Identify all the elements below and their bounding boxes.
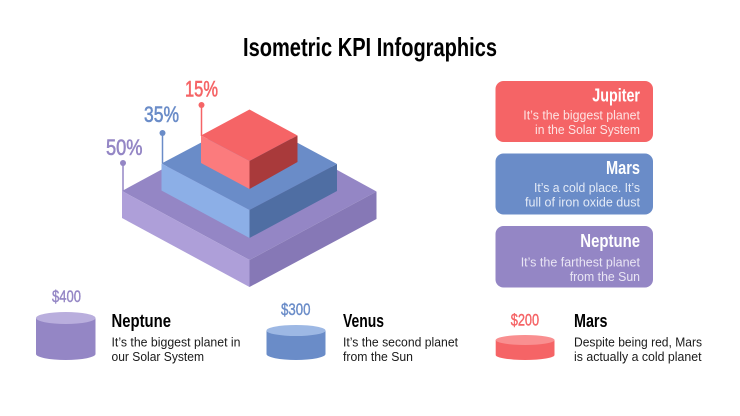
panel: Jupiter card: Jupiter [592, 86, 640, 106]
description: Venus: It’s the second planet [343, 336, 459, 350]
icon: red cylinder [496, 335, 554, 360]
panel: Neptune card [496, 226, 653, 288]
KPI item: Venus [266, 301, 459, 364]
panel: Jupiter card: It’s the biggest planet [523, 108, 641, 122]
KPI item: Mars [496, 311, 702, 364]
KPI item: Neptune [36, 288, 241, 364]
panel: Jupiter card [496, 81, 653, 142]
description: Neptune [112, 336, 241, 364]
label: 15%: 15% [185, 76, 218, 102]
value: $400: $400 [52, 288, 81, 306]
value: $300: $300 [281, 301, 310, 319]
pyramid layer: 50% purple base [122, 122, 376, 287]
heading: Mars: Mars [574, 311, 608, 331]
panel: Neptune card: It’s the farthest planet [521, 256, 641, 270]
panel: Neptune card: Neptune [580, 231, 640, 251]
heading: Neptune: Neptune [112, 311, 171, 331]
panel: Mars card: Mars [606, 158, 640, 178]
isometric pyramid chart [106, 76, 376, 287]
icon: purple cylinder [36, 312, 96, 360]
description: Venus: from the Sun [343, 350, 413, 364]
panel: Jupiter card: in the Solar System [535, 123, 640, 137]
label: 35%: 35% [144, 102, 179, 127]
description: Mars [574, 336, 702, 364]
description: Neptune: It’s the biggest planet in [112, 336, 241, 350]
title: Isometric KPI Infographics [243, 32, 497, 62]
panel: Mars card: It’s a cold place. It’s [534, 181, 640, 195]
description: Neptune: our Solar System [112, 350, 204, 364]
pin: 15% [198, 102, 204, 136]
heading: Venus: Venus [343, 311, 384, 331]
panel: Neptune card: from the Sun [570, 270, 640, 284]
pin: 35% [160, 130, 166, 163]
icon: blue cylinder [266, 325, 326, 360]
value: $200: $200 [511, 312, 539, 330]
label: 50%: 50% [106, 135, 142, 160]
panel: Mars card: full of iron oxide dust [525, 196, 641, 210]
description: Venus [343, 336, 459, 364]
pyramid layer: 15% red top [201, 110, 298, 189]
panel: Mars card [496, 154, 653, 214]
description: Mars: Despite being red, Mars [574, 336, 702, 350]
pin: 50% [120, 160, 126, 191]
pyramid layer: 35% blue middle [162, 117, 337, 238]
description: Mars: is actually a cold planet [574, 350, 702, 364]
